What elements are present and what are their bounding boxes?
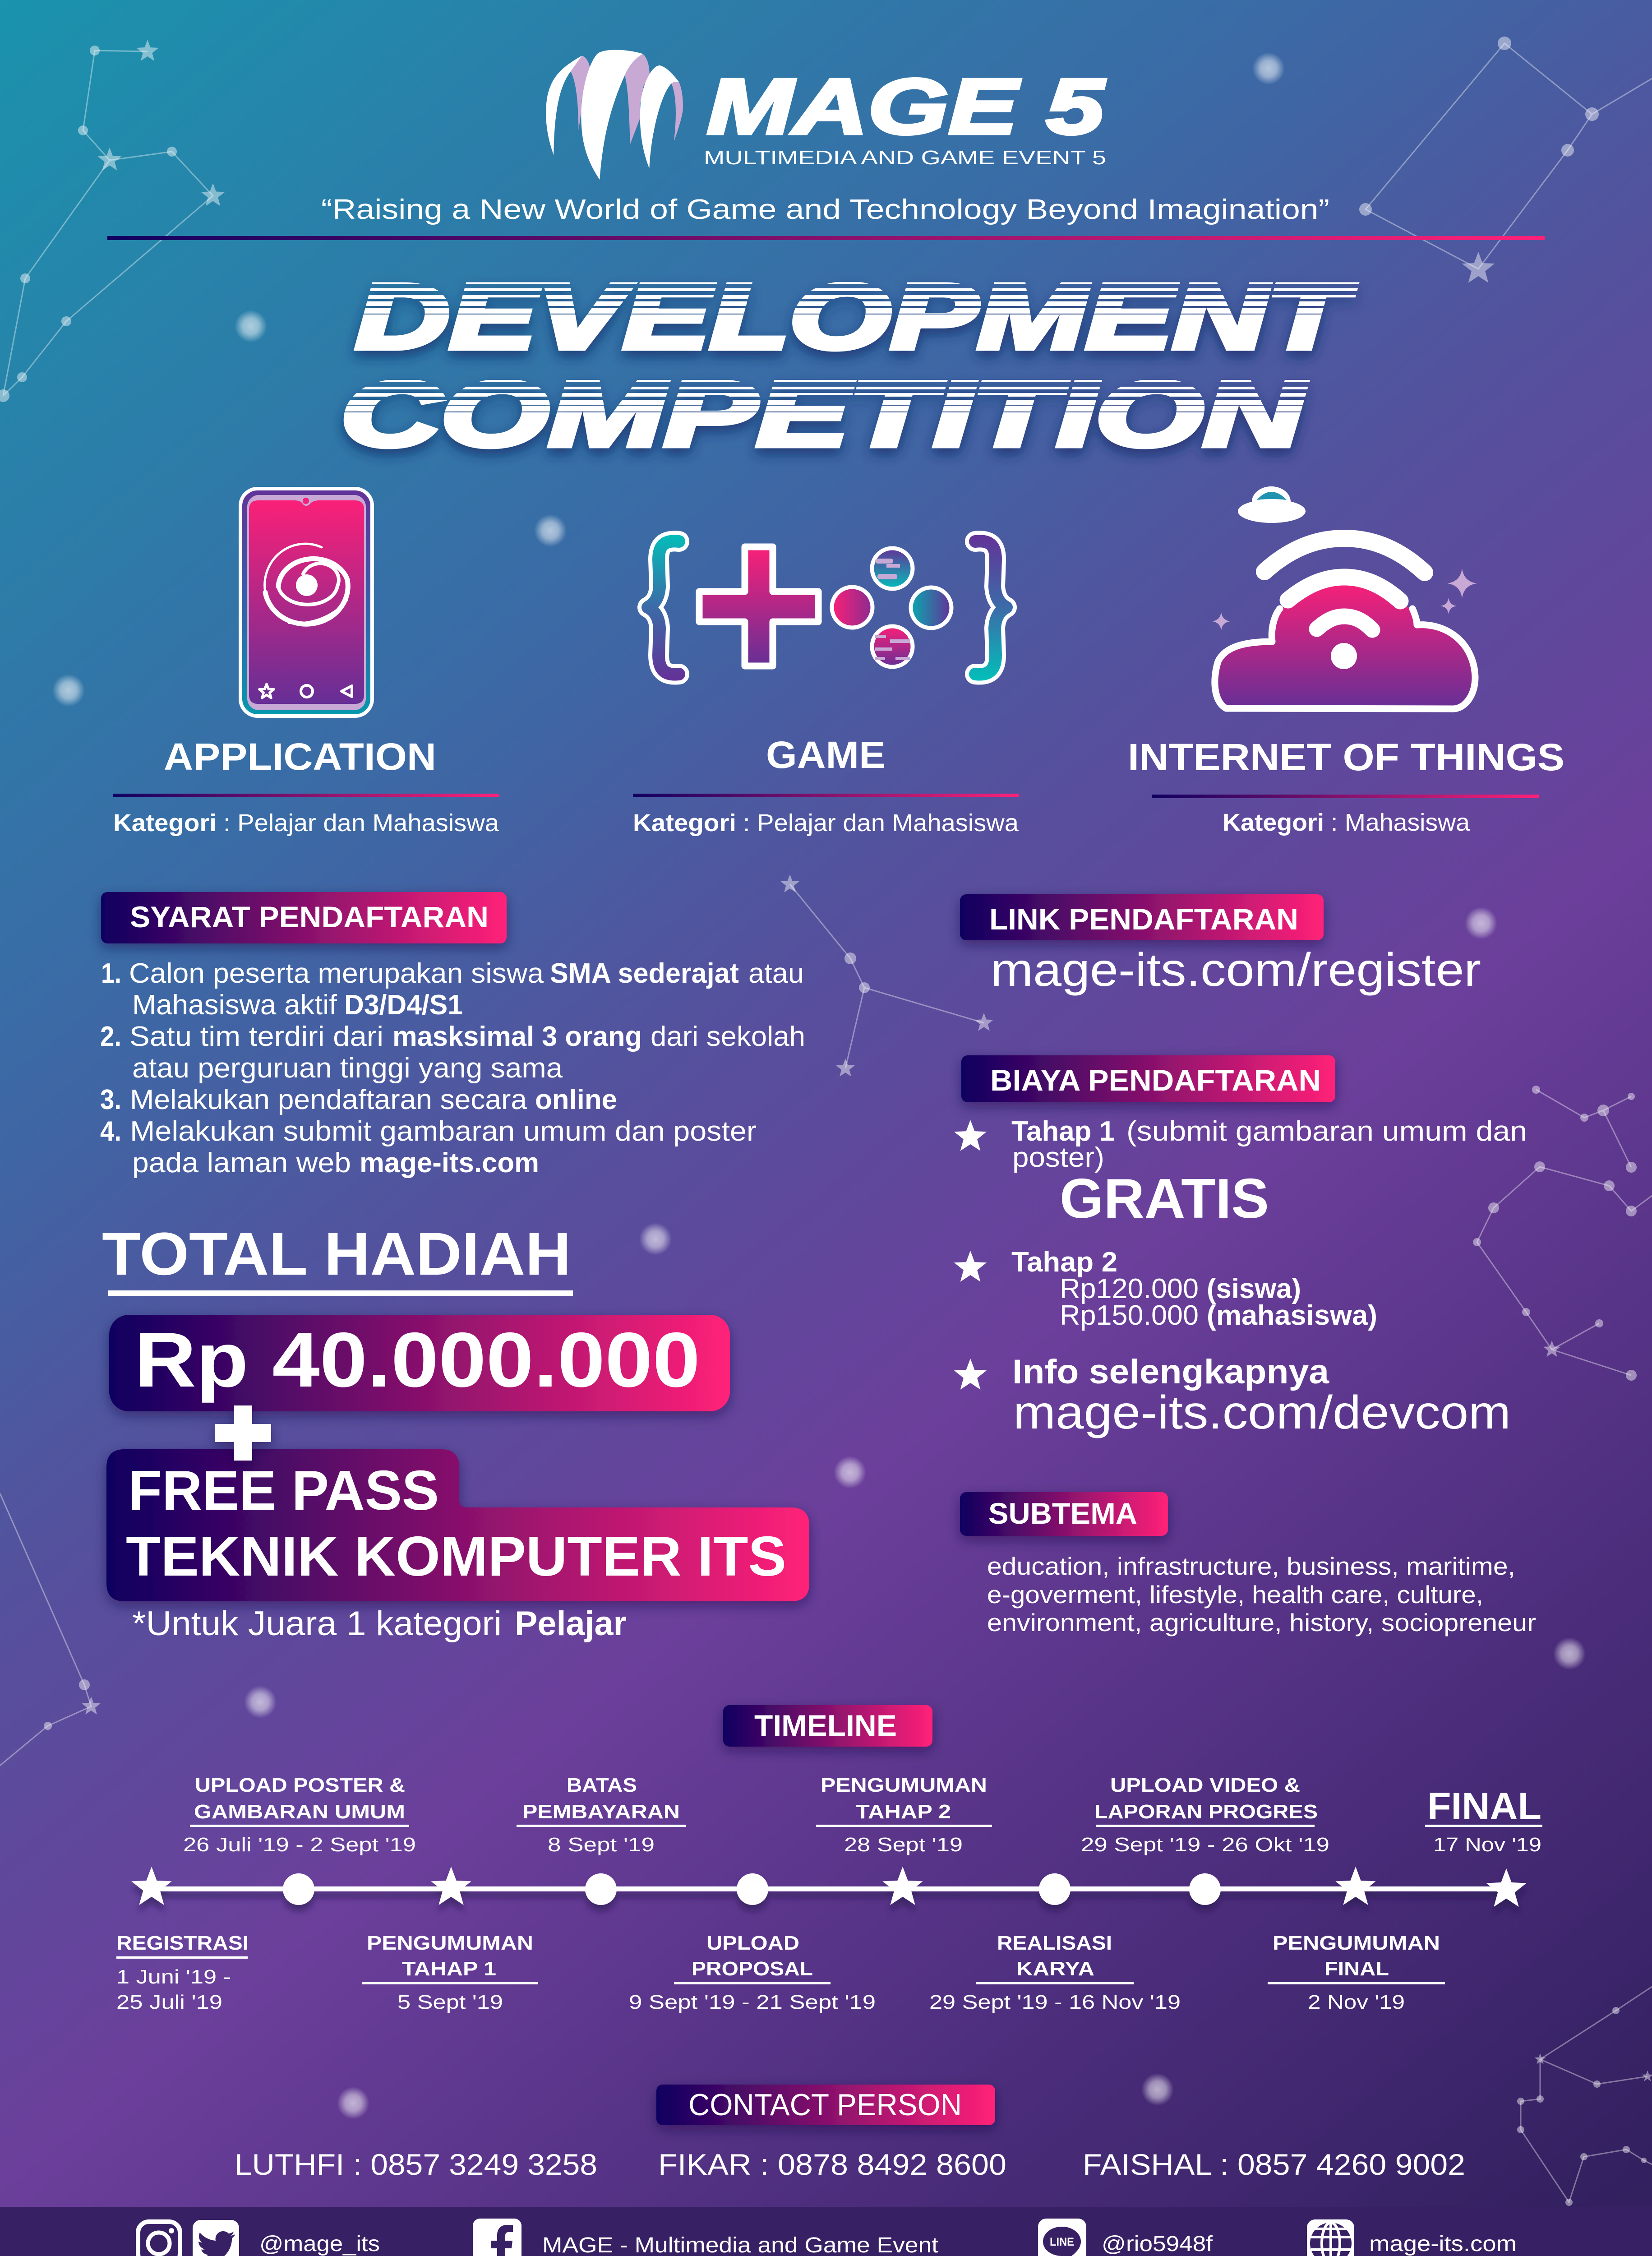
header divider — [107, 236, 1545, 240]
milestone: upload poster: GAMBARAN UMUM — [194, 1801, 405, 1823]
heading badge: SYARAT PENDAFTARAN — [130, 900, 489, 934]
list of requirements: SMA sederajat — [550, 958, 739, 989]
category: application: : Pelajar dan Mahasiswa — [223, 809, 499, 837]
logo wordmark: MULTIMEDIA AND GAME EVENT 5 — [704, 147, 1106, 169]
heading badge — [961, 1055, 1335, 1102]
icon: instagram — [138, 2222, 180, 2256]
social: line: LINE — [1050, 2236, 1074, 2248]
milestone: upload video: LAPORAN PROGRES — [1094, 1801, 1318, 1823]
note: Pelajar — [515, 1604, 627, 1643]
social: line — [1038, 2219, 1213, 2256]
milestone: pengumuman tahap 2: TAHAP 2 — [856, 1801, 951, 1823]
tahap 2: Rp150.000 — [1060, 1300, 1199, 1331]
list of requirements: 1. — [101, 958, 121, 989]
milestone: upload video — [1081, 1774, 1329, 1856]
milestone: pengumuman tahap 1: 5 Sept '19 — [397, 1991, 503, 2013]
tahap 2 — [954, 1247, 1377, 1331]
logo: MAGE claw mark — [546, 50, 683, 180]
category: game: Kategori — [633, 809, 736, 837]
list of requirements: Melakukan submit gambaran umum dan poster — [130, 1116, 757, 1147]
icon: ufo — [1238, 486, 1306, 523]
tagline: “Raising a New World of Game and Technology Beyond Imagination” — [321, 194, 1329, 225]
category: application: APPLICATION — [164, 735, 436, 778]
panel: link pendaftaran: mage-its.com/register — [991, 944, 1481, 996]
list of requirements: atau — [748, 958, 804, 989]
list of requirements: Calon peserta merupakan siswa — [129, 958, 544, 989]
milestone: batas pembayaran: 8 Sept '19 — [548, 1834, 655, 1856]
prize amount: Rp 40.000.000 — [134, 1317, 700, 1403]
milestone: upload proposal: UPLOAD — [706, 1932, 799, 1954]
tahap 1: poster) — [1012, 1142, 1104, 1173]
free pass — [106, 1449, 809, 1601]
panel: subtema: education, infrastructure, business, maritime, — [987, 1552, 1515, 1580]
title — [341, 265, 1356, 466]
social: instagram and twitter: @mage_its — [259, 2232, 380, 2256]
milestone: pengumuman final: PENGUMUMAN — [1273, 1932, 1440, 1954]
milestone: pengumuman tahap 1 — [362, 1932, 538, 2013]
contact numbers: FIKAR : 0878 8492 8600 — [658, 2148, 1006, 2181]
icon: galaxy spiral — [265, 544, 348, 624]
heading badge: BIAYA PENDAFTARAN — [990, 1063, 1321, 1097]
milestone: pengumuman final: 2 Nov '19 — [1308, 1991, 1405, 2013]
icon: game buttons — [832, 548, 951, 667]
milestone: upload poster: UPLOAD POSTER & — [195, 1774, 405, 1796]
panel: link pendaftaran — [960, 894, 1481, 996]
icon: phone application — [240, 489, 372, 716]
tahap 1 — [954, 1116, 1527, 1230]
contact numbers: LUTHFI : 0857 3249 3258 — [235, 2148, 597, 2181]
tahap 2: (mahasiswa) — [1207, 1300, 1377, 1331]
title: DEVELOPMENT — [355, 265, 1356, 368]
info selengkapnya: mage-its.com/devcom — [1013, 1387, 1511, 1439]
category: game: : Pelajar dan Mahasiswa — [743, 809, 1019, 837]
milestone: realisasi karya — [929, 1932, 1181, 2013]
title: COMPETITION — [341, 362, 1306, 466]
tahap 2: Tahap 2 — [1011, 1247, 1117, 1278]
panel: subtema: SUBTEMA — [988, 1497, 1137, 1530]
category: application: Kategori — [113, 809, 217, 837]
icon: phone nav buttons — [259, 684, 352, 698]
tahap 1: (submit gambaran umum dan — [1126, 1116, 1527, 1147]
milestone: pengumuman tahap 2: 28 Sept '19 — [844, 1834, 963, 1856]
logo wordmark — [704, 62, 1106, 169]
milestone: upload proposal — [629, 1932, 876, 2013]
milestone: final: 17 Nov '19 — [1433, 1834, 1541, 1856]
list of requirements: 3. — [100, 1084, 121, 1115]
milestone: batas pembayaran: BATAS — [567, 1774, 637, 1796]
footer band — [0, 2207, 1652, 2256]
milestone: registrasi: REGISTRASI — [116, 1932, 249, 1954]
panel: total hadiah — [102, 1220, 809, 1643]
timeline heading — [723, 1705, 932, 1747]
list of requirements: online — [535, 1084, 617, 1115]
milestone: registrasi — [116, 1932, 249, 2013]
contact numbers — [235, 2148, 1465, 2181]
icon: game controller — [648, 541, 1006, 675]
category: application — [113, 735, 499, 837]
list of requirements: Satu tim terdiri dari — [129, 1021, 383, 1052]
list of requirements: 2. — [100, 1021, 121, 1052]
list of requirements: D3/D4/S1 — [344, 989, 463, 1021]
panel: subtema — [960, 1492, 1536, 1637]
free pass: FREE PASS — [128, 1460, 439, 1522]
list of requirements: 4. — [100, 1116, 121, 1147]
social: website: mage-its.com — [1369, 2232, 1517, 2256]
category: internet of things: Kategori — [1223, 809, 1324, 836]
milestone: upload poster: 26 Juli '19 - 2 Sept '19 — [183, 1834, 416, 1856]
milestone: registrasi: 1 Juni '19 - — [116, 1966, 231, 1988]
category: game — [633, 734, 1019, 837]
milestone: realisasi karya: REALISASI — [997, 1932, 1112, 1954]
milestone: pengumuman tahap 2 — [816, 1774, 992, 1856]
contact person heading: CONTACT PERSON — [688, 2088, 962, 2122]
timeline heading: TIMELINE — [754, 1709, 897, 1742]
milestone: pengumuman tahap 1: PENGUMUMAN — [367, 1932, 533, 1954]
social: facebook — [473, 2219, 938, 2256]
info selengkapnya: Info selengkapnya — [1012, 1353, 1329, 1391]
milestone: pengumuman tahap 1: TAHAP 1 — [402, 1958, 496, 1980]
category: internet of things — [1128, 736, 1564, 836]
milestone: batas pembayaran — [517, 1774, 686, 1856]
info selengkapnya — [954, 1353, 1511, 1439]
milestone: upload proposal: PROPOSAL — [692, 1958, 813, 1980]
list of requirements: mage-its.com — [360, 1147, 539, 1179]
icon: twitter — [193, 2220, 239, 2256]
milestone: upload poster — [183, 1774, 416, 1856]
milestone: upload video: UPLOAD VIDEO & — [1110, 1774, 1300, 1796]
tahap 1: GRATIS — [1060, 1168, 1269, 1230]
category: internet of things: : Mahasiswa — [1331, 809, 1470, 836]
milestone: upload video: 29 Sept '19 - 26 Okt '19 — [1081, 1834, 1329, 1856]
list of requirements — [100, 958, 805, 1179]
panel: subtema: e-goverment, lifestyle, health care, culture, — [987, 1581, 1483, 1609]
tahap 2: (siswa) — [1207, 1273, 1301, 1304]
timeline axis — [131, 1867, 1527, 1907]
heading badge — [101, 892, 507, 943]
contact numbers: FAISHAL : 0857 4260 9002 — [1083, 2148, 1465, 2181]
milestone: pengumuman final: FINAL — [1324, 1958, 1389, 1980]
panel: syarat pendaftaran — [100, 892, 805, 1179]
heading: TOTAL HADIAH — [102, 1220, 571, 1288]
list of requirements: Mahasiswa aktif — [132, 989, 337, 1021]
milestone: pengumuman tahap 2: PENGUMUMAN — [821, 1774, 987, 1796]
milestone: batas pembayaran: PEMBAYARAN — [522, 1801, 680, 1823]
logo wordmark: MAGE 5 — [707, 62, 1105, 150]
panel: biaya pendaftaran — [954, 1055, 1527, 1439]
milestone: final — [1425, 1785, 1542, 1856]
category: internet of things: INTERNET OF THINGS — [1128, 736, 1564, 778]
category: game: GAME — [766, 734, 886, 776]
list of requirements: masksimal 3 orang — [392, 1021, 642, 1052]
social: line: @rio5948f — [1102, 2232, 1213, 2256]
list of requirements: pada laman web — [132, 1147, 351, 1179]
milestone: final: FINAL — [1427, 1785, 1541, 1827]
panel: subtema: environment, agriculture, history, sociopreneur — [987, 1609, 1536, 1637]
tahap 1: Tahap 1 — [1011, 1116, 1115, 1147]
milestone: upload proposal: 9 Sept '19 - 21 Sept '19 — [629, 1991, 876, 2013]
free pass: TEKNIK KOMPUTER ITS — [126, 1526, 786, 1588]
milestone: registrasi: 25 Juli '19 — [116, 1991, 222, 2013]
milestone: realisasi karya: KARYA — [1016, 1958, 1094, 1980]
social: instagram and twitter — [138, 2220, 380, 2256]
icon: sparkles — [1212, 569, 1477, 630]
milestone: pengumuman final — [1268, 1932, 1445, 2013]
icon: d-pad — [699, 547, 818, 666]
list of requirements: atau perguruan tinggi yang sama — [132, 1053, 563, 1084]
note: *Untuk Juara 1 kategori — [132, 1604, 502, 1643]
list of requirements: Melakukan pendaftaran secara — [130, 1084, 527, 1115]
icon: internet of things cloud — [1212, 486, 1477, 709]
tahap 2: Rp120.000 — [1060, 1273, 1199, 1304]
panel: link pendaftaran: LINK PENDAFTARAN — [989, 902, 1298, 936]
plus sign — [215, 1405, 271, 1461]
milestone: realisasi karya: 29 Sept '19 - 16 Nov '19 — [929, 1991, 1181, 2013]
list of requirements: dari sekolah — [651, 1021, 805, 1052]
social: website — [1307, 2219, 1517, 2256]
